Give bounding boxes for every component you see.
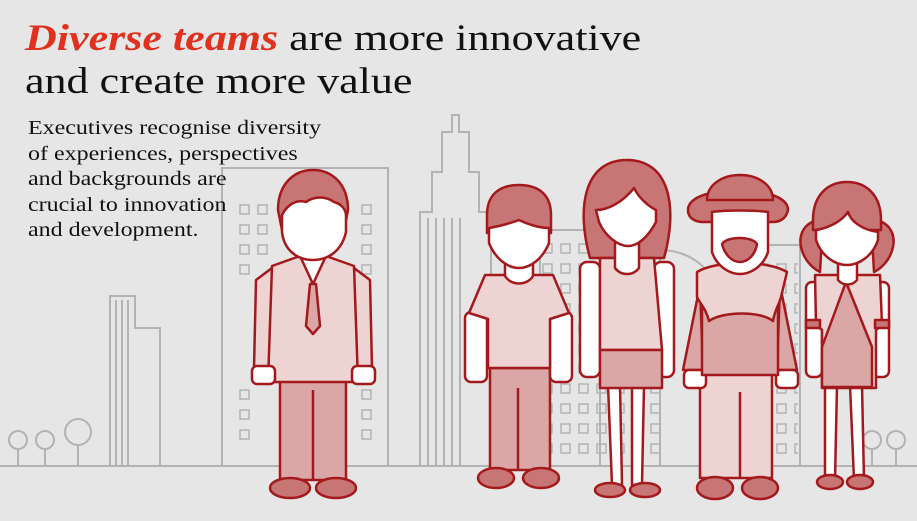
body text: crucial to innovation — [28, 194, 226, 216]
title: Diverse teams are more innovative — [25, 18, 641, 59]
body text: Executives recognise diversity — [28, 117, 321, 139]
figure: boy — [465, 185, 572, 488]
title — [24, 18, 641, 102]
body text: and backgrounds are — [28, 168, 226, 190]
title: and create more value — [25, 61, 412, 102]
figure: man in suit — [252, 170, 375, 498]
body text: and development. — [28, 219, 199, 241]
body text: of experiences, perspectives — [28, 143, 298, 165]
figure: bearded man with hat — [683, 175, 798, 499]
city skyline — [0, 115, 917, 466]
figure: girl with pigtails — [800, 182, 894, 489]
figure: woman with long hair — [580, 160, 674, 497]
body text — [28, 117, 322, 241]
